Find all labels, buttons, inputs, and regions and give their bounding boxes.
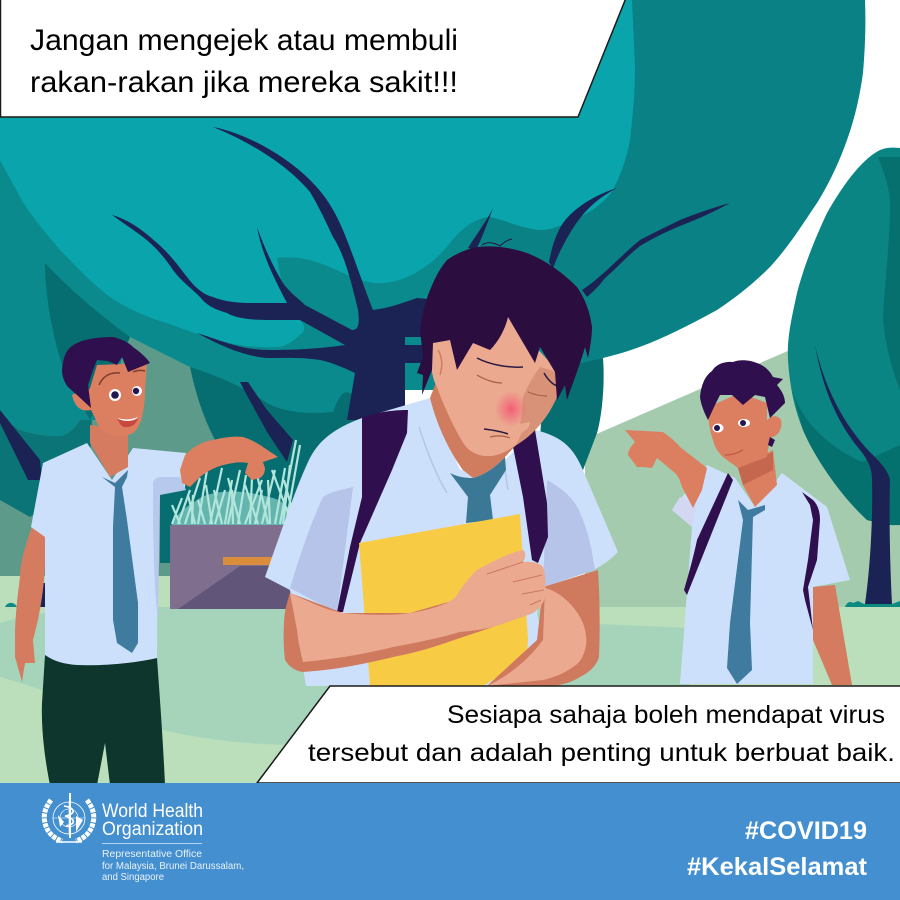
main boy right arm [487,570,600,686]
left boy smile [117,417,138,427]
left boy head [72,363,147,436]
main boy face [431,317,557,456]
main boy face shade [516,367,557,445]
left boy back arm [15,527,45,682]
right boy shirt [672,465,850,684]
main boy sleeve shade [290,480,595,613]
left boy hair [62,337,150,408]
main boy folder [359,514,528,686]
left boy shirt [31,443,186,665]
top speech box [0,0,626,117]
right boy neck [738,450,777,507]
tree trunk and branches [0,127,730,480]
right boy sleeve shade [672,497,697,527]
main tree [0,0,865,563]
right boy straps [684,473,820,630]
main boy hugging arm and hand [290,550,546,662]
left boy pointing arm [180,437,278,487]
footer band [0,783,900,900]
WHO office text: for Malaysia, Brunei Darussalam, [102,861,244,872]
left boy brows [99,370,145,385]
main boy shirt [265,398,618,686]
right boy mouth [725,450,743,455]
main boy hugging arm shade [284,593,533,672]
main boy neck [430,380,516,478]
left boy trousers [42,655,165,785]
main boy backpack straps [337,410,548,612]
main boy hair [417,246,592,400]
left boy eyes [109,389,121,401]
main boy red nose [495,391,527,427]
main boy collar folds [419,427,508,493]
WHO name: Organization [102,819,203,840]
main boy stray hairs [482,239,512,246]
hashtags: #KekalSelamat [687,853,868,881]
hashtags: #COVID19 [745,817,867,845]
left boy sleeve shade [153,477,186,620]
top speech text: rakan-rakan jika mereka sakit!!! [30,66,458,99]
WHO name: World Health [102,801,203,822]
top speech text: Jangan mengejek atau membuli [30,24,458,57]
planter with grass [170,440,300,609]
icon: WHO emblem [44,793,94,842]
WHO office text: and Singapore [102,872,164,883]
main boy finger lines [487,562,544,605]
right boy [625,360,852,685]
main boy closed eyes and mouth [477,358,557,434]
bottom speech text: tersebut dan adalah penting untuk berbuat baik. [308,739,895,767]
right boy pointing arm [625,430,707,508]
main boy ear [438,350,442,375]
main boy [265,239,618,686]
left boy neck [90,425,128,477]
right boy head [708,393,781,468]
right tree [788,148,900,607]
bottom speech text: Sesiapa sahaja boleh mendapat virus [447,701,885,729]
right boy far arm [812,585,852,685]
bottom speech box [257,686,900,783]
left boy tie [102,470,138,653]
left boy [15,337,278,785]
right boy tie [727,500,765,684]
right boy eyes [712,424,724,432]
right boy hair [700,360,785,447]
WHO office text: Representative Office [102,849,202,860]
main boy tie [450,457,506,523]
